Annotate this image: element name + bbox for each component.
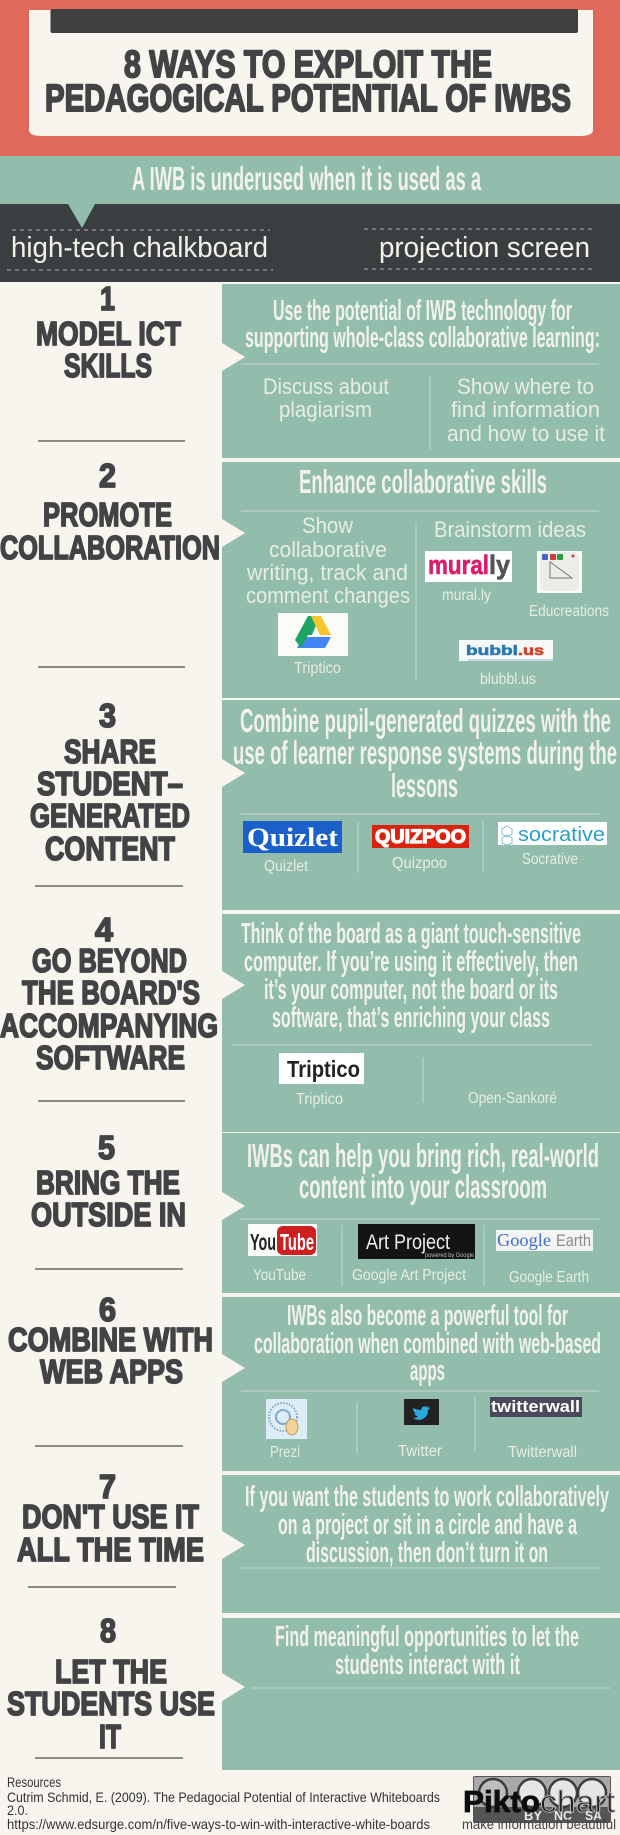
header banner	[0, 0, 620, 156]
way 2 label	[0, 457, 220, 667]
dark bar	[50, 9, 578, 33]
dark band with misuse options	[0, 204, 620, 282]
logo: Google Earth: Earth	[556, 1231, 591, 1250]
panel 5: Google Art Project	[352, 1267, 467, 1284]
panel 5: YouTube	[253, 1267, 306, 1284]
panel 6	[222, 1297, 620, 1471]
way 7 label: ALL THE TIME	[17, 1531, 204, 1568]
panel 2: Brainstorm ideas	[434, 517, 586, 542]
panel 2: comment changes	[246, 583, 410, 608]
way 1 label: 1	[100, 280, 115, 317]
panel 2: collaborative	[269, 537, 387, 562]
way 8 label: LET THE	[55, 1653, 167, 1690]
panel 2: Show	[302, 513, 353, 538]
resources: https://www.edsurge.com/n/five-ways-to-win-with-interactive-white-boards	[7, 1816, 430, 1832]
logo: YouTube	[248, 1224, 317, 1256]
title: 8 WAYS TO EXPLOIT THE	[124, 44, 492, 86]
way 6 label: 6	[99, 1291, 116, 1328]
panel 2: Educreations	[529, 603, 609, 620]
logo: bubbl.us: .us	[518, 642, 544, 658]
logo: twitterwall: twitterwall	[491, 1397, 580, 1416]
way 1 label	[36, 280, 185, 441]
badge: Creative Commons: SA	[585, 1808, 603, 1823]
badge: Creative Commons	[473, 1776, 611, 1823]
way 4 label: 4	[95, 911, 114, 948]
logo: YouTube: Tube	[280, 1229, 314, 1255]
pointer	[68, 204, 95, 228]
icon: Educreations	[537, 551, 582, 593]
badge: Creative Commons: NC	[554, 1808, 573, 1823]
panel 4: Open-Sankoré	[468, 1090, 557, 1107]
way 8 label: IT	[99, 1718, 121, 1755]
way 3 label: GENERATED	[30, 797, 190, 834]
logo: YouTube: You	[250, 1229, 276, 1255]
logo: bubbl.us	[459, 640, 553, 661]
logo: Google Earth	[496, 1230, 593, 1251]
title card	[29, 10, 593, 136]
way 4 label: SOFTWARE	[36, 1039, 185, 1076]
way 7 label: DON'T USE IT	[22, 1498, 199, 1535]
panel 3: Quizpoo	[392, 855, 447, 872]
way 1 label: SKILLS	[64, 347, 152, 384]
icon: Google Drive	[278, 613, 348, 656]
logo: murally: ly	[489, 550, 510, 580]
resources: 2.0.	[7, 1802, 28, 1818]
resources: Resources	[7, 1774, 61, 1790]
logo: Triptico: Triptico	[287, 1056, 360, 1082]
panel 2: blubbl.us	[480, 671, 536, 688]
way 8 label: 8	[100, 1612, 116, 1649]
logo: Quizlet: Quizlet	[247, 823, 338, 852]
way 4 label: THE BOARD'S	[22, 974, 200, 1011]
panel 1: Show where to	[457, 374, 594, 399]
icon: Twitter	[404, 1399, 439, 1425]
panel 1: and how to use it	[447, 421, 605, 446]
panel 1: plagiarism	[279, 397, 372, 422]
panel 1: find information	[451, 397, 600, 422]
way 8 label: STUDENTS USE	[7, 1685, 215, 1722]
logo: Google Earth: Google	[497, 1230, 551, 1250]
way 7 label	[17, 1468, 204, 1587]
logo: Art Project	[358, 1224, 475, 1259]
way 5 label: BRING THE	[36, 1164, 180, 1201]
way 1 label: MODEL ICT	[36, 315, 181, 352]
way 3 label: STUDENT–	[37, 765, 183, 802]
option: high-tech chalkboard: high-tech chalkboard	[11, 232, 268, 264]
panel 1	[222, 284, 620, 458]
logo: Socrative: socrative	[518, 824, 605, 846]
way 3 label: 3	[99, 697, 116, 734]
way 5 label: OUTSIDE IN	[31, 1196, 186, 1233]
logo: Piktochart: Pikto	[463, 1784, 540, 1819]
logo: murally: mural	[428, 550, 489, 580]
panel 4: Triptico	[296, 1091, 343, 1108]
way 2 label: PROMOTE	[43, 496, 172, 533]
panel 2	[222, 462, 620, 698]
panel 2: mural.ly	[442, 587, 491, 604]
badge: Creative Commons: BY	[524, 1808, 542, 1823]
way 3 label: SHARE	[64, 733, 156, 770]
panel 3: lessons	[391, 767, 458, 804]
logo: Art Project: Art Project	[366, 1231, 450, 1254]
way 6 label: WEB APPS	[40, 1353, 183, 1390]
panel 2: writing, track and	[246, 560, 408, 585]
panel 2: Triptico	[294, 660, 341, 677]
way 5 label	[31, 1129, 186, 1269]
intro band	[0, 156, 620, 204]
logo: bubbl.us: bubbl	[466, 642, 518, 658]
option: projection screen: projection screen	[379, 232, 590, 264]
logo: Quizpoo: QUIZPOO	[375, 827, 466, 848]
panel 4	[222, 914, 620, 1132]
panel 6: Twitterwall	[508, 1444, 577, 1461]
logo: Art Project: powered by Google	[425, 1253, 475, 1259]
way 3 label	[30, 697, 190, 886]
panel 5	[222, 1133, 620, 1293]
panel 3	[222, 700, 620, 910]
panel 6: apps	[410, 1355, 445, 1387]
way 6 label	[8, 1291, 213, 1446]
way 2 label: 2	[99, 457, 116, 494]
way 5 label: 5	[98, 1129, 115, 1166]
way 6 label: COMBINE WITH	[8, 1321, 213, 1358]
panel 3: Quizlet	[264, 858, 309, 875]
panel 8	[222, 1618, 620, 1770]
resources: Cutrim Schmid, E. (2009). The Pedagocial Potential of Interactive Whiteboards	[7, 1789, 440, 1805]
logo: Socrative	[498, 822, 607, 846]
panel 3: Socrative	[522, 851, 578, 868]
way 4 label: GO BEYOND	[32, 942, 187, 979]
way 8 label	[7, 1612, 215, 1758]
logo: Piktochart	[462, 1784, 616, 1832]
panel 7	[222, 1475, 620, 1613]
title	[45, 44, 571, 120]
way 7 label: 7	[99, 1468, 116, 1505]
way 3 label: CONTENT	[45, 830, 175, 867]
way 4 label	[0, 911, 218, 1101]
panel 5: Google Earth	[509, 1269, 589, 1286]
panel 1: Discuss about	[263, 374, 389, 399]
panel 6: Twitter	[398, 1443, 442, 1460]
panel 6: Prezi	[270, 1444, 300, 1461]
logo: Piktochart: chart	[540, 1784, 615, 1819]
icon: Prezi	[266, 1399, 307, 1439]
way 2 label: COLLABORATION	[0, 529, 220, 566]
resources	[7, 1774, 440, 1832]
way 4 label: ACCOMPANYING	[0, 1007, 218, 1044]
